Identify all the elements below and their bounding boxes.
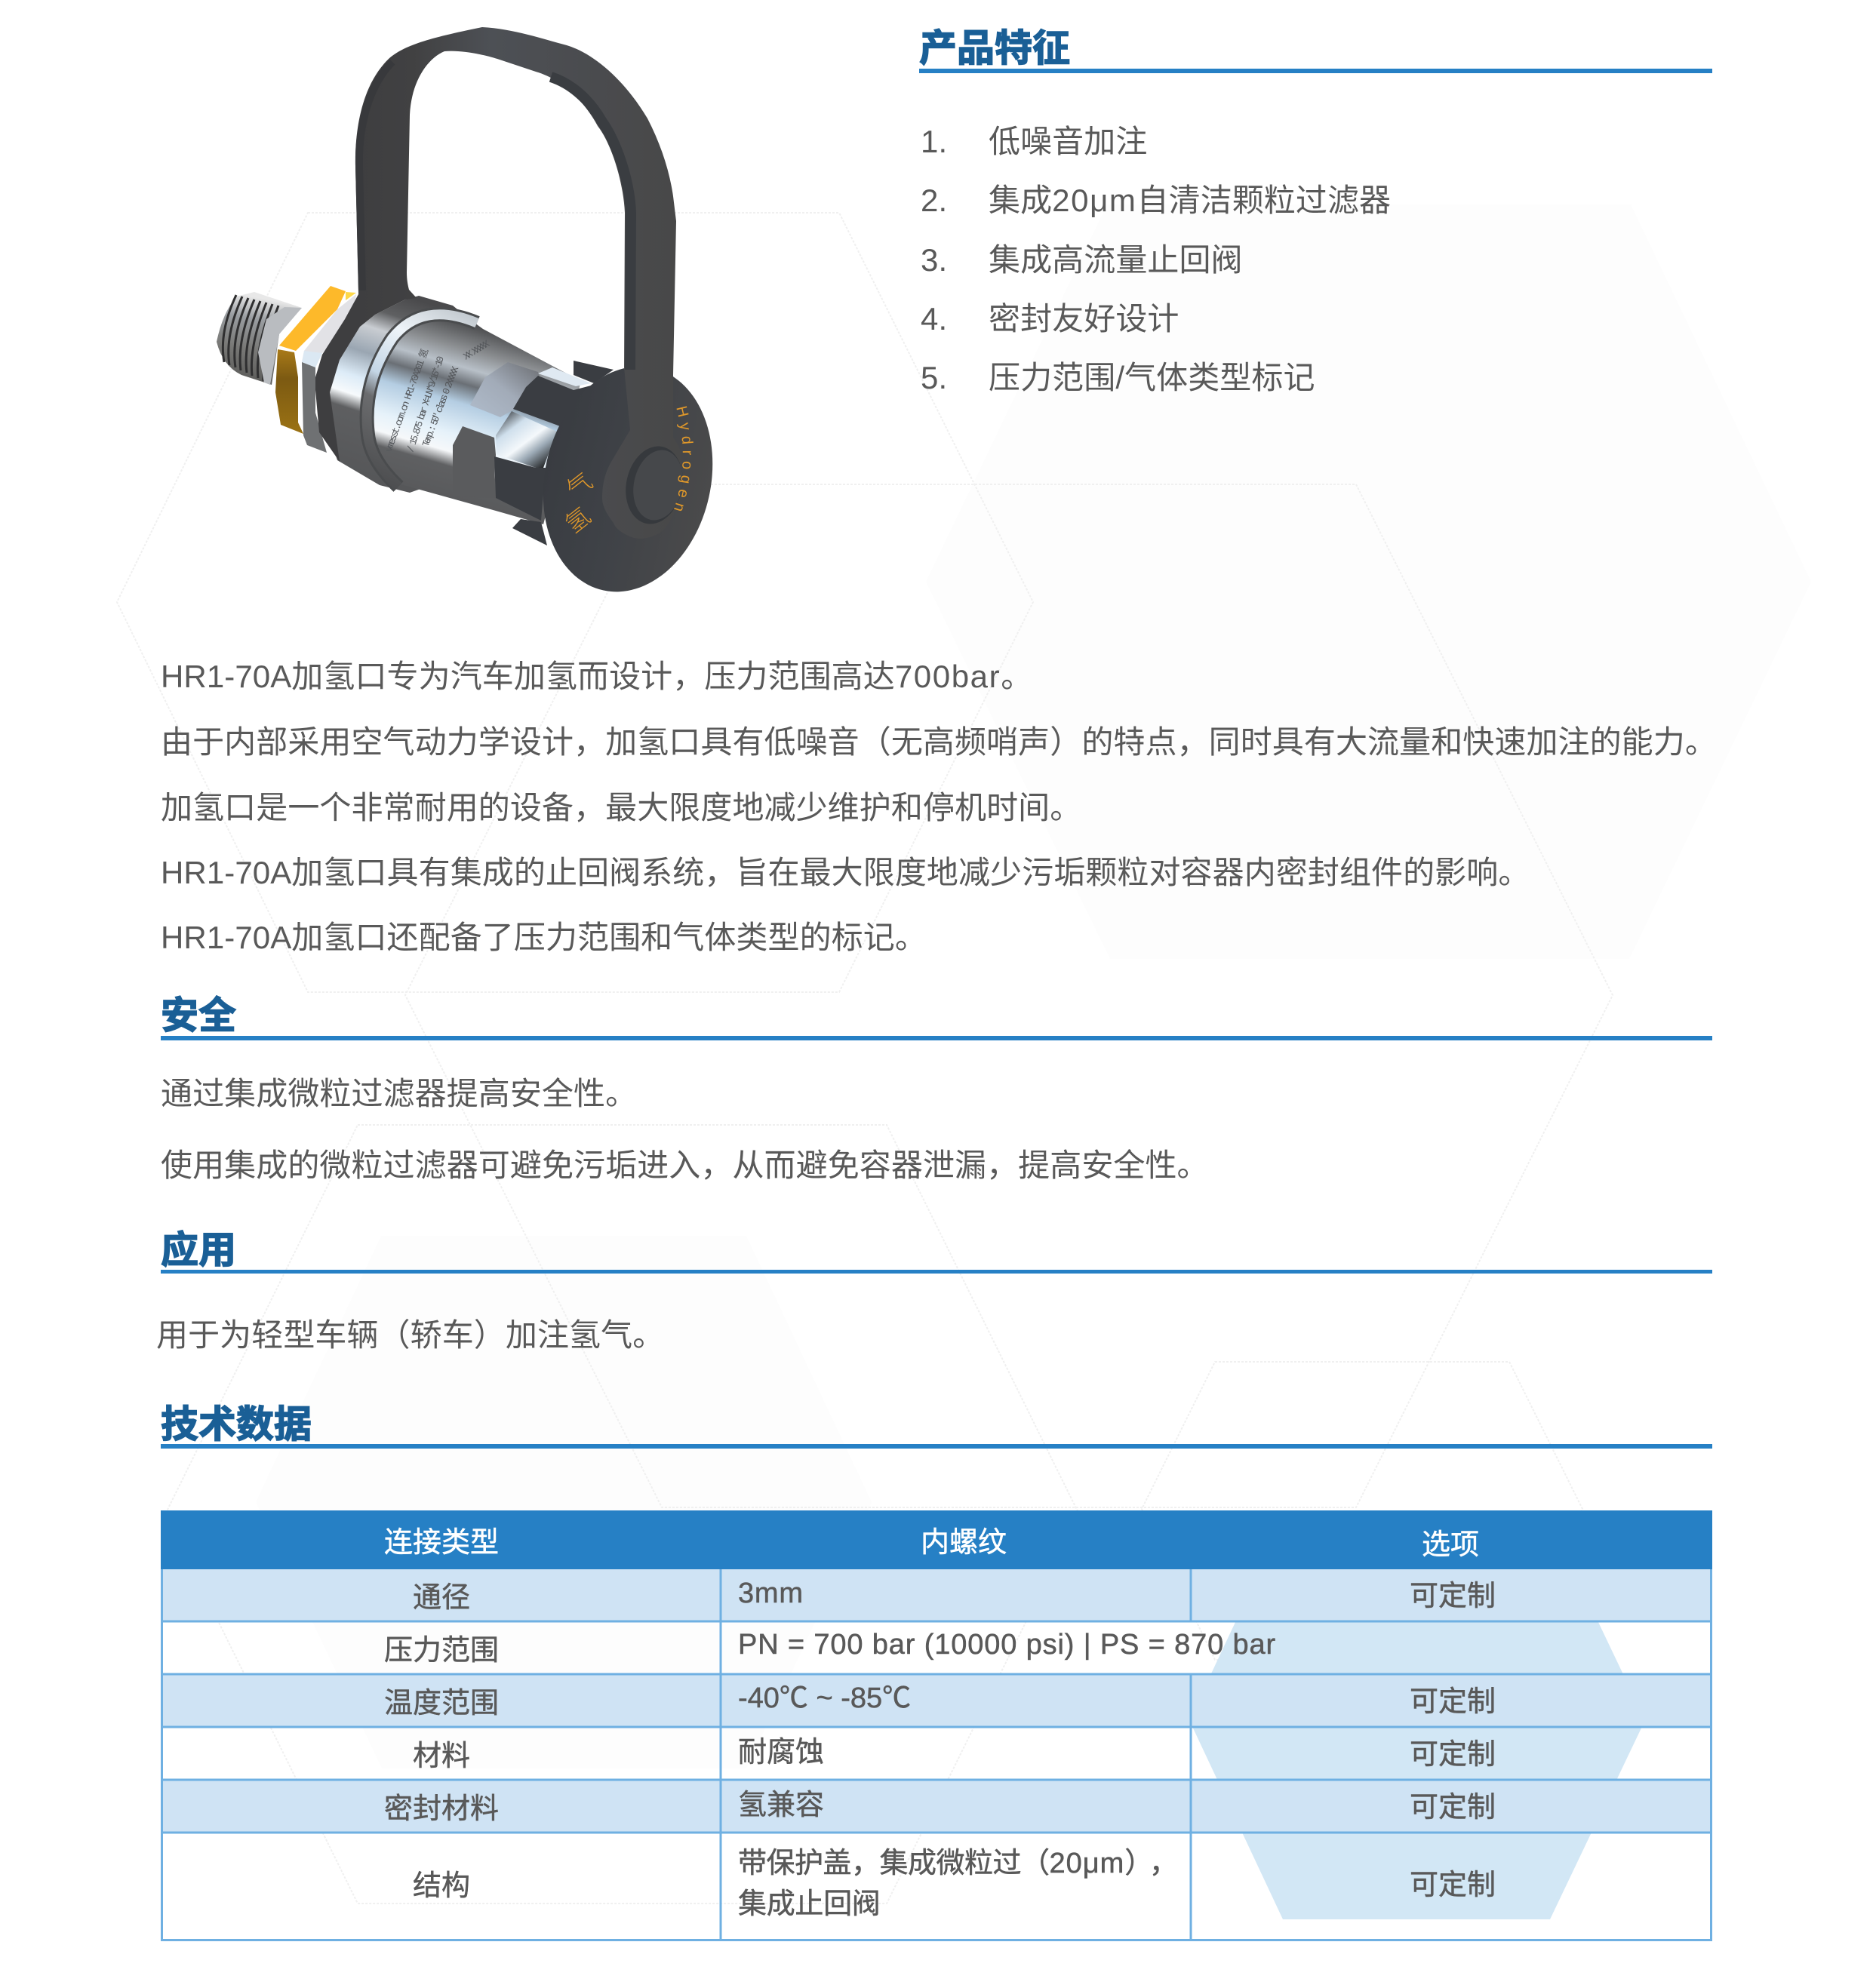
value: structure: 带保护盖，集成微粒过（20μm） ，	[738, 1848, 1177, 1879]
safety text 1: 通过集成微粒过滤器提高安全性。	[161, 1076, 637, 1111]
threaded fitting	[217, 292, 302, 385]
cap lettering	[674, 407, 683, 509]
section heading: 应用: 应用	[161, 1229, 236, 1271]
wrench flats on body	[453, 362, 540, 498]
yellow hex nut	[275, 286, 356, 434]
value: structure line 2: 集成止回阀	[738, 1888, 881, 1920]
header cell: 选项: 选项	[1422, 1529, 1479, 1561]
description line 1: HR1-70A加氢口专为汽车加氢而设计，压力范围高达700bar。	[161, 659, 1032, 694]
chrome body rear section	[368, 315, 581, 524]
section heading: 技术数据: 技术数据	[161, 1403, 312, 1446]
description line 4: HR1-70A加氢口具有集成的止回阀系统，旨在最大限度地减少污垢颗粒对容器内密封组件的影响。	[161, 855, 1530, 890]
product photo: hydrogen receptacle with cap	[217, 27, 712, 591]
section heading: 安全: 安全	[161, 994, 236, 1037]
section heading: 产品特征: 产品特征	[919, 27, 1070, 69]
feature 5: 5.	[921, 360, 947, 395]
body collar	[367, 315, 477, 487]
value: pressure: PN = 700 bar (10000 psi) | PS = 870 bar	[738, 1629, 1276, 1661]
technical data table	[161, 1510, 1712, 1941]
shaded row 5	[161, 1781, 1712, 1833]
heading rule: 产品特征	[919, 69, 1712, 73]
description line 5: HR1-70A加氢口还配备了压力范围和气体类型的标记。	[161, 920, 927, 955]
product description	[161, 659, 1717, 955]
feature 2: 集成20μm自清洁颗粒过滤器	[989, 183, 1391, 218]
option: 密封材料: 可定制	[1410, 1792, 1496, 1824]
table header	[161, 1510, 1712, 1569]
heading rule: 应用	[161, 1270, 1712, 1274]
feature 1: 1.	[921, 124, 947, 159]
option: 结构: 可定制	[1410, 1870, 1496, 1901]
row label: 结构: 结构	[413, 1870, 470, 1902]
feature 5: 压力范围/气体类型标记	[989, 360, 1315, 395]
retaining strap	[315, 27, 681, 539]
option: 材料: 可定制	[1410, 1739, 1496, 1771]
product photo: hydrogen receptacle with cap: 氢	[557, 498, 597, 540]
value: 3mm: 3mm	[738, 1578, 804, 1609]
product photo: hydrogen receptacle with cap: 气	[558, 463, 598, 505]
shaded row 1	[161, 1569, 1712, 1622]
row label: 温度范围: 温度范围	[384, 1688, 499, 1719]
option: 温度范围: 可定制	[1410, 1686, 1496, 1718]
header cell: 连接类型: 连接类型	[384, 1527, 499, 1559]
chrome body front section	[327, 296, 483, 493]
heading rule: 安全	[161, 1036, 1712, 1040]
application text: 用于为轻型车辆（轿车）加注氢气。	[156, 1317, 664, 1353]
row label: 通径: 通径	[413, 1582, 470, 1614]
engraved marking: / 15.875 bar X=LN*9/16*-10	[405, 355, 447, 453]
shaded row 3	[161, 1675, 1712, 1728]
heading rule: 技术数据	[161, 1444, 1712, 1449]
header cell: 内螺纹: 内螺纹	[921, 1527, 1007, 1559]
engraved marking	[383, 338, 492, 453]
feature 2: 2.	[921, 183, 947, 218]
product photo: hydrogen receptacle with cap: Hydrogen	[674, 406, 694, 512]
cap pin	[619, 441, 690, 530]
cap disc	[522, 350, 734, 608]
steel hex nut	[302, 294, 356, 453]
chrome valve stem	[496, 411, 557, 468]
feature 4: 4.	[921, 301, 947, 336]
rear collet tabs	[512, 361, 614, 545]
feature list	[921, 124, 1391, 395]
fitting neck	[258, 307, 302, 385]
feature 1: 低噪音加注	[989, 124, 1147, 159]
feature 3: 3.	[921, 242, 947, 278]
row label: 密封材料: 密封材料	[384, 1793, 499, 1825]
engraved marking: XX XXXXX	[461, 338, 492, 362]
value: material: 耐腐蚀	[738, 1737, 824, 1768]
engraved marking: vmesst.com.cn HR1-70A201 氢	[383, 347, 431, 453]
feature 3: 集成高流量止回阀	[989, 242, 1243, 278]
black collet fingers	[494, 367, 594, 521]
engraved marking: Temp.: 50" class 0 2XXXXX	[420, 364, 461, 448]
value: temperature: -40℃ ~ -85℃	[738, 1682, 911, 1714]
row label: 材料: 材料	[413, 1741, 470, 1772]
table grid	[161, 1569, 1712, 1941]
option: 通径: 可定制	[1410, 1581, 1496, 1612]
description line 3: 加氢口是一个非常耐用的设备，最大限度地减少维护和停机时间。	[161, 790, 1081, 825]
row label: 压力范围: 压力范围	[384, 1635, 499, 1667]
description line 2: 由于内部采用空气动力学设计，加氢口具有低噪音（无高频哨声）的特点，同时具有大流量和快速加注的能力。	[161, 724, 1717, 760]
feature 4: 密封友好设计	[989, 301, 1179, 336]
safety text 2: 使用集成的微粒过滤器可避免污垢进入，从而避免容器泄漏，提高安全性。	[161, 1148, 1209, 1183]
value: seal: 氢兼容	[738, 1790, 824, 1821]
